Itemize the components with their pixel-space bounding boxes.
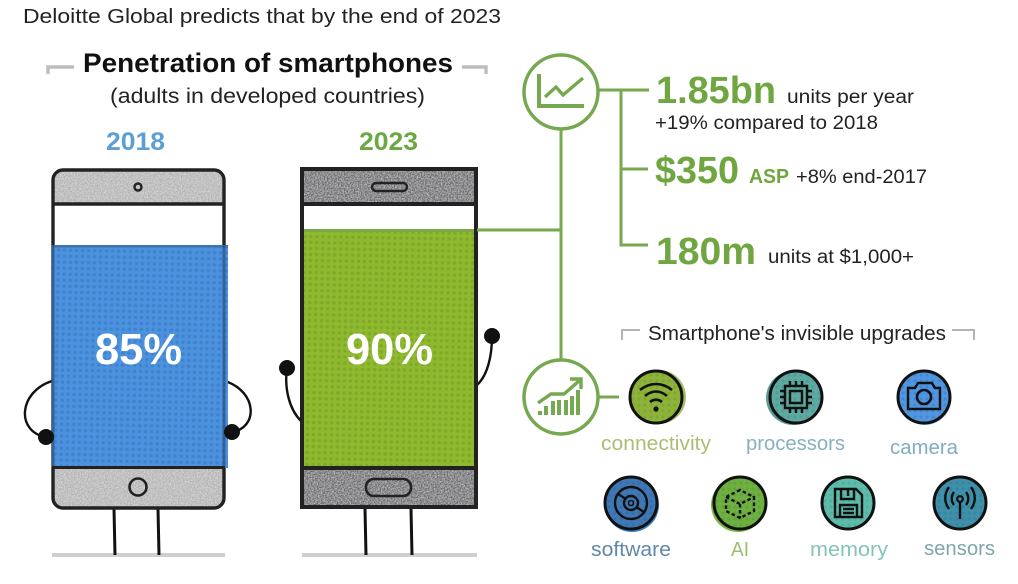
upgrade: software (591, 477, 671, 561)
stat: 1.85bn units: +19% compared to 2018 (655, 113, 878, 134)
upgrade: processors: processors (746, 433, 845, 455)
phone 2023 fill top edge (303, 229, 475, 232)
stat: 1.85bn units: 1.85bn (656, 70, 776, 112)
upgrade: camera: camera (890, 437, 959, 459)
phone 2018 arms (25, 381, 251, 437)
stat: $350 ASP: +8% end-2017 (796, 167, 927, 188)
phone 2023 (279, 168, 500, 557)
upgrade: sensors (924, 477, 995, 560)
stat: 180m units: units at $1,000+ (768, 247, 914, 268)
icon: line chart circle (524, 55, 598, 129)
phone 2018 bezel line (53, 245, 224, 467)
stat: 180m units (656, 231, 914, 273)
phone 2018 (25, 169, 251, 557)
phone 2018 hand left (38, 429, 54, 445)
phone 2023 header (301, 168, 475, 203)
heading: invisible upgrades: Smartphone's invisible upgrades (648, 323, 946, 345)
stat: $350 ASP: $350 (655, 150, 739, 192)
icon: growth bars circle (524, 360, 598, 434)
connector to upgrades (598, 396, 619, 398)
connector lines (477, 90, 649, 360)
phone 2023 outline (302, 169, 476, 507)
heading: penetration of smartphones: (adults in developed countries) (110, 84, 425, 108)
upgrade: memory (810, 477, 888, 561)
year label 2023: 2023 (359, 128, 418, 156)
stat: 1.85bn units: units per year (787, 87, 915, 108)
phone 2018 divider (52, 466, 225, 469)
upgrade: software: software (591, 539, 671, 561)
stat: $350 ASP (655, 150, 927, 192)
phone 2023 arms (286, 336, 492, 421)
phone 2023 fill 90 percent (303, 230, 475, 468)
heading: penetration of smartphones: Penetration of smartphones (83, 48, 453, 78)
upgrade: sensors: sensors (924, 538, 995, 560)
phone 2023 footer (303, 468, 474, 506)
upgrade: AI (711, 477, 766, 561)
phone 2018 ground line (52, 553, 225, 557)
phone 2018 fill 85 percent (52, 245, 228, 468)
upgrade: connectivity (601, 370, 711, 455)
phone 2018 value: 85% (95, 325, 182, 374)
stat: 1.85bn units (655, 70, 915, 134)
stat: 180m units: 180m (656, 231, 756, 273)
upgrade: memory: memory (810, 539, 888, 561)
phone 2023 speaker (372, 183, 407, 191)
upgrade: AI: AI (731, 539, 749, 561)
year label 2018: 2018 (106, 128, 165, 156)
phone 2023 home button (366, 479, 411, 496)
phone 2023 hand left (279, 360, 295, 376)
phone 2018 body (52, 169, 225, 509)
phone 2018 hand right (224, 424, 240, 440)
title: Deloitte Global predicts that by the end of 2023 (23, 5, 501, 28)
phone 2023 ground line (302, 553, 477, 557)
upgrade: connectivity: connectivity (601, 433, 711, 455)
phone 2023 value: 90% (346, 325, 433, 374)
phone 2023 hand right (484, 328, 500, 344)
phone 2018 legs (114, 509, 159, 555)
phone 2018 outline (53, 170, 224, 508)
phone 2018 white screen area (53, 204, 224, 246)
phone 2023 legs (365, 509, 412, 555)
phone 2018 camera (134, 184, 142, 190)
upgrade: camera (890, 371, 959, 459)
stat: $350 ASP: ASP (749, 166, 789, 188)
heading: penetration of smartphones (48, 48, 486, 108)
upgrade: processors (746, 371, 845, 455)
phone 2018 fill top edge (52, 245, 228, 248)
phone 2018 home button (130, 478, 146, 496)
